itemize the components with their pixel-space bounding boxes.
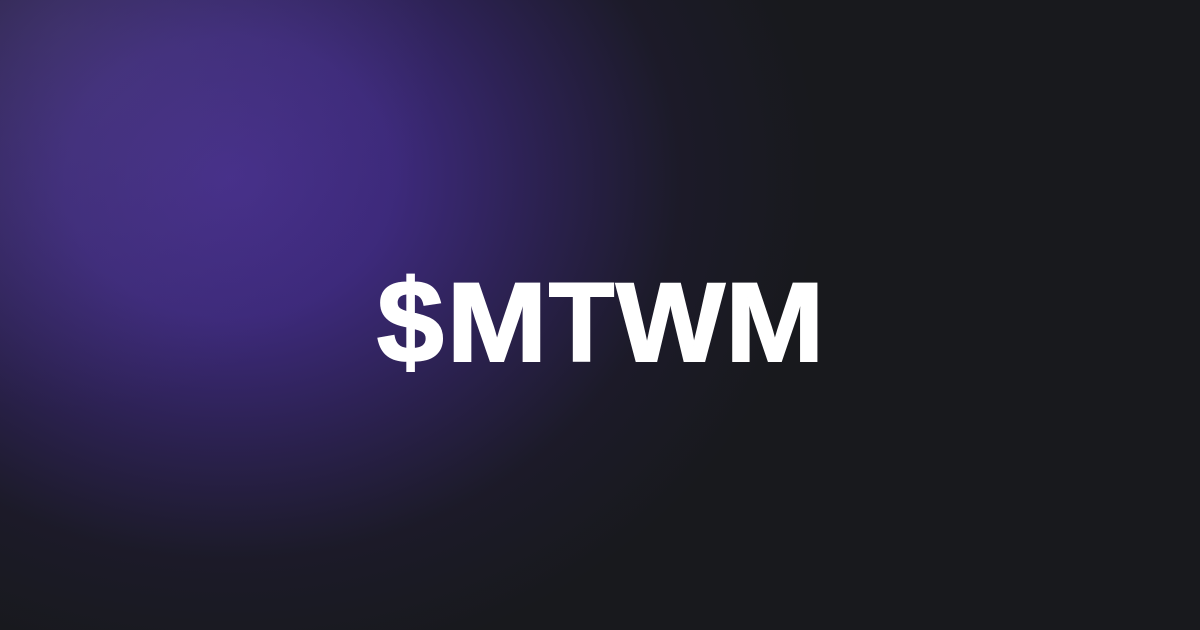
title: W [616, 261, 726, 386]
title: $ [377, 257, 444, 388]
title: T [549, 261, 614, 386]
title: M [447, 260, 547, 385]
title: M [725, 261, 824, 385]
